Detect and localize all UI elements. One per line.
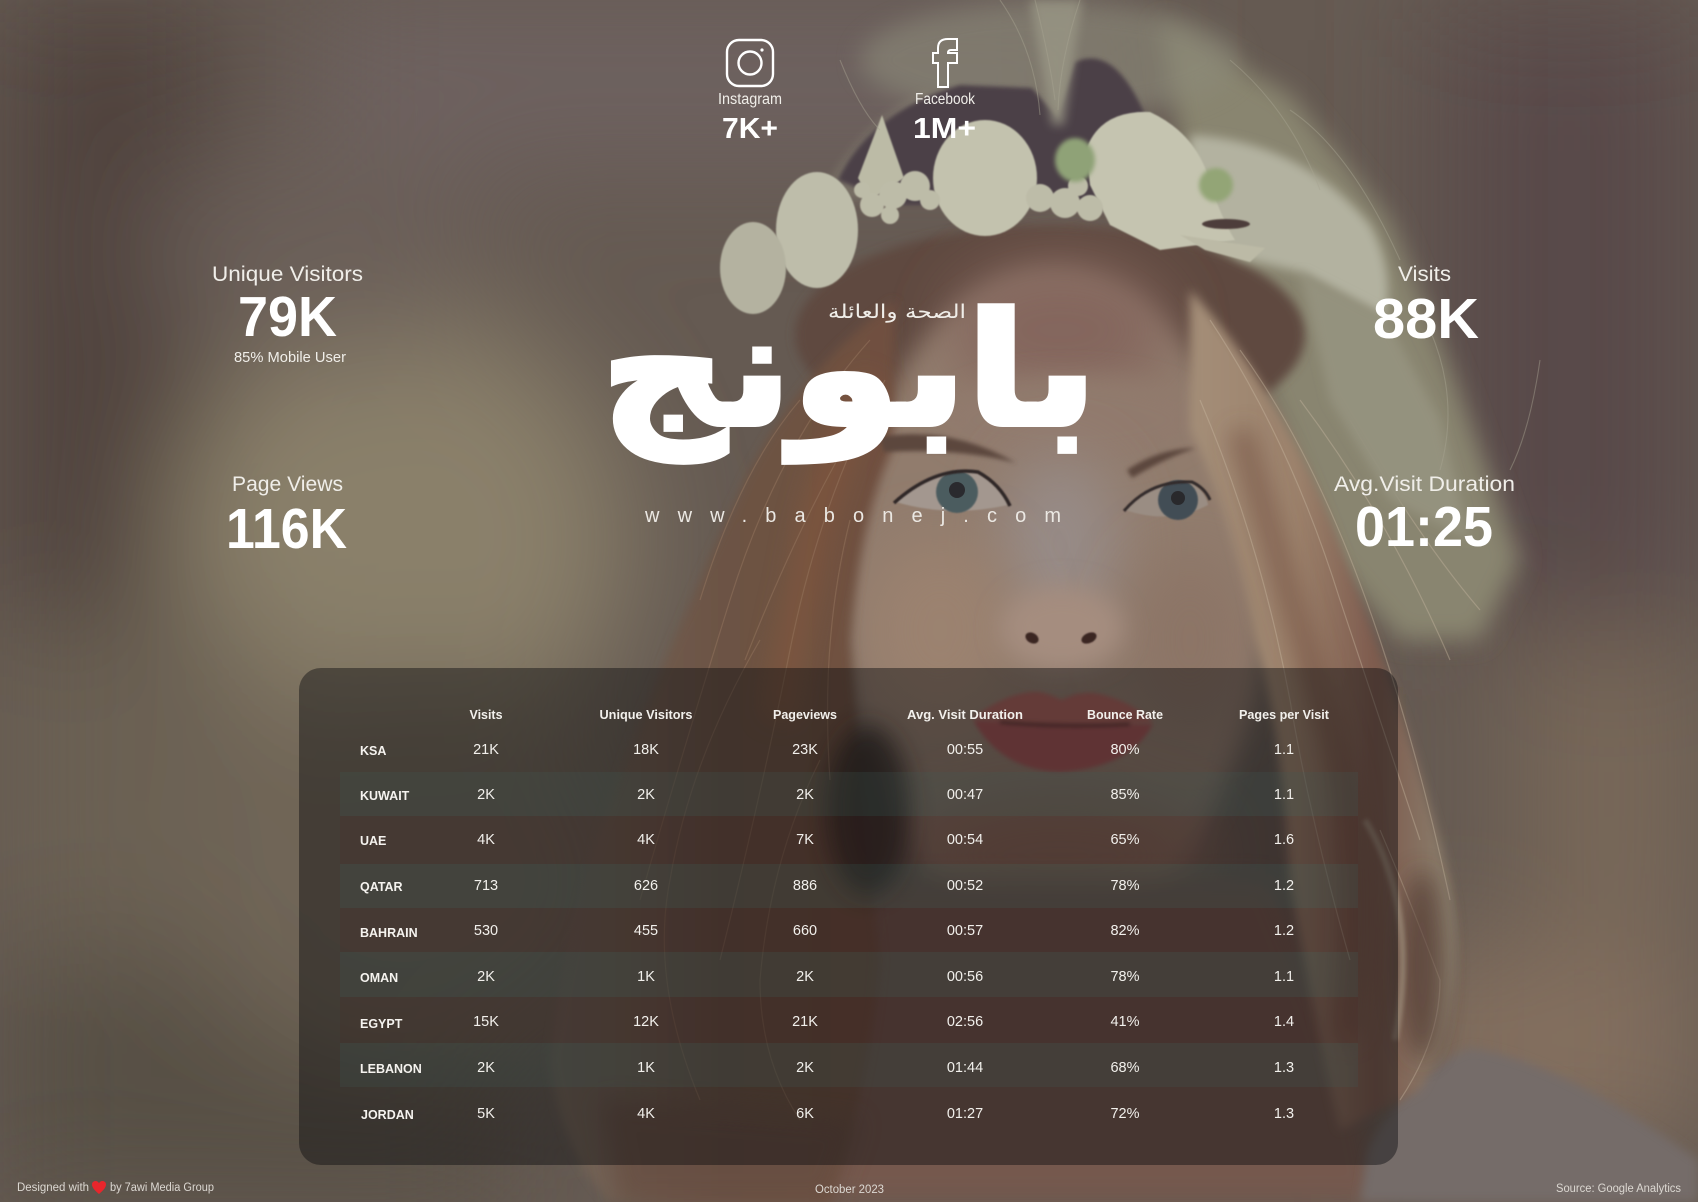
head hair below crown	[795, 225, 1305, 445]
row: Kuwait: 85%	[1110, 787, 1140, 803]
row: Jordan: 01:27	[947, 1106, 983, 1122]
row: UAE: 65%	[1110, 832, 1140, 848]
Facebook label: Facebook	[915, 91, 975, 108]
row: Egypt: 02:56	[947, 1014, 983, 1030]
row: Qatar: QATAR	[360, 880, 403, 894]
frizz parting	[1030, 0, 1082, 125]
stat: Unique Visitors	[212, 263, 363, 366]
stat: Avg. Visit Duration	[1334, 473, 1515, 559]
row: Kuwait: 2K	[796, 787, 814, 803]
row: UAE: 4K	[637, 832, 655, 848]
Instagram followers: 7K+	[722, 113, 778, 145]
footer: designer credit: Designed with	[17, 1182, 89, 1194]
stat: Visits: 88K	[1373, 287, 1479, 351]
row: Oman: OMAN	[360, 971, 398, 985]
flower crown	[720, 112, 1470, 540]
logo name: بابونج	[601, 280, 1097, 462]
row: Oman: 00:56	[947, 969, 983, 985]
footer: designer credit	[17, 1181, 214, 1194]
sweater	[1360, 1048, 1698, 1202]
row: Lebanon: 1K	[637, 1060, 655, 1076]
row: Oman	[360, 969, 1294, 985]
logo: Babonej wordmark	[601, 280, 1097, 527]
footer: date: October 2023	[815, 1184, 884, 1196]
row: UAE: 7K	[796, 832, 814, 848]
row: Oman: 2K	[477, 969, 495, 985]
row: Qatar: 78%	[1110, 878, 1140, 894]
face	[640, 260, 1380, 1202]
row: Qatar: 00:52	[947, 878, 983, 894]
row: Kuwait: KUWAIT	[360, 789, 410, 803]
row: Qatar	[360, 878, 1294, 894]
left hair	[550, 300, 910, 1202]
website: www.babonej.com	[644, 505, 1061, 527]
stat: Instagram	[718, 40, 782, 145]
table header: Pageviews	[773, 707, 837, 722]
table header: Unique Visitors	[600, 707, 692, 722]
icon: heart	[92, 1181, 106, 1194]
row: Jordan: 4K	[637, 1106, 655, 1122]
nose	[1023, 630, 1098, 646]
row: Kuwait	[360, 787, 1294, 803]
row: Bahrain	[360, 923, 1294, 940]
stat: Unique Visitors: 85% Mobile User	[234, 350, 346, 366]
stat: Avg. Visit Duration: 01:25	[1355, 495, 1493, 559]
row: UAE: 1.6	[1274, 832, 1294, 848]
row: Bahrain: 660	[793, 923, 817, 939]
logo tagline: الصحة والعائلة	[828, 301, 966, 323]
row: Lebanon: 1.3	[1274, 1060, 1294, 1076]
stat: Visits: Visits	[1398, 263, 1451, 286]
row: Bahrain: 00:57	[947, 923, 983, 939]
stat: Page Views	[226, 473, 347, 561]
row: Kuwait: 00:47	[947, 787, 983, 803]
row: Bahrain: BAHRAIN	[360, 926, 418, 940]
stat: Facebook	[913, 39, 976, 145]
row: Egypt: 1.4	[1274, 1014, 1294, 1030]
row: Kuwait: 1.1	[1274, 787, 1294, 803]
footer: source: Source: Google Analytics	[1556, 1183, 1681, 1195]
Facebook followers: 1M+	[913, 113, 976, 145]
row: Jordan: 72%	[1110, 1106, 1140, 1122]
row: Qatar: 886	[793, 878, 817, 894]
row: KSA: 80%	[1110, 742, 1140, 758]
icon: Facebook	[933, 39, 957, 87]
table header: Avg. Visit Duration	[907, 707, 1023, 722]
row: Lebanon: LEBANON	[360, 1062, 422, 1076]
row: Oman: 78%	[1110, 969, 1140, 985]
footer: designer credit: by 7awi Media Group	[110, 1182, 214, 1194]
neck and chest	[640, 880, 1380, 1202]
row: Jordan: 1.3	[1274, 1106, 1294, 1122]
row: Lebanon: 01:44	[947, 1060, 983, 1076]
row: Kuwait: 2K	[477, 787, 495, 803]
table header: Visits	[470, 707, 502, 722]
row: Lebanon: 68%	[1110, 1060, 1140, 1076]
left eye and brow	[880, 434, 1016, 513]
row: UAE: 4K	[477, 832, 495, 848]
dark crown of hair	[838, 58, 1155, 205]
row: KSA: KSA	[360, 744, 386, 758]
row: Egypt: 12K	[633, 1014, 659, 1030]
table header: Pages per Visit	[1239, 707, 1330, 722]
row: Oman: 2K	[796, 969, 814, 985]
stat: Unique Visitors: 79K	[238, 285, 337, 349]
row: Egypt: EGYPT	[360, 1017, 403, 1031]
row: Egypt: 15K	[473, 1014, 499, 1030]
row: UAE: 00:54	[947, 832, 983, 848]
table header	[470, 707, 1330, 722]
row: Lebanon: 2K	[477, 1060, 495, 1076]
row: Kuwait: 2K	[637, 787, 655, 803]
row: Jordan: 6K	[796, 1106, 814, 1122]
row: Qatar: 626	[634, 878, 658, 894]
icon: Instagram	[727, 40, 773, 86]
row: Bahrain: 82%	[1110, 923, 1140, 939]
row: Bahrain: 530	[474, 923, 498, 939]
row: Egypt: 41%	[1110, 1014, 1140, 1030]
row: Qatar: 713	[474, 878, 498, 894]
row: Lebanon: 2K	[796, 1060, 814, 1076]
lips	[973, 692, 1153, 772]
right eye and brow	[1124, 448, 1210, 520]
row: Bahrain: 455	[634, 923, 658, 939]
stat: Page Views: 116K	[226, 497, 347, 561]
stat: Avg. Visit Duration: Avg.Visit Duration	[1334, 473, 1515, 496]
row: KSA: 21K	[473, 742, 499, 758]
row: Egypt	[360, 1014, 1294, 1031]
stray hair strands	[840, 0, 1540, 470]
right hair	[1190, 290, 1480, 1130]
table header: Bounce Rate	[1087, 707, 1163, 722]
sunlit hair halo	[820, 2, 1520, 640]
row: Bahrain: 1.2	[1274, 923, 1294, 939]
row: KSA: 23K	[792, 742, 818, 758]
row: KSA: 1.1	[1274, 742, 1294, 758]
row: Jordan	[361, 1106, 1294, 1122]
row: Oman: 1K	[637, 969, 655, 985]
social stats row	[718, 39, 976, 145]
Instagram label: Instagram	[718, 91, 782, 108]
row: Lebanon	[360, 1060, 1294, 1076]
row: Oman: 1.1	[1274, 969, 1294, 985]
panel: country statistics table	[299, 668, 1398, 1165]
row: KSA	[360, 742, 1294, 758]
stat: Unique Visitors: Unique Visitors	[212, 263, 363, 286]
row: UAE: UAE	[360, 834, 386, 848]
row: KSA: 18K	[633, 742, 659, 758]
table row stripes	[340, 772, 1358, 1087]
row: KSA: 00:55	[947, 742, 983, 758]
row: Egypt: 21K	[792, 1014, 818, 1030]
row: UAE	[360, 832, 1294, 848]
row: Jordan: JORDAN	[361, 1108, 414, 1122]
stat: Page Views: Page Views	[232, 473, 343, 496]
row: Qatar: 1.2	[1274, 878, 1294, 894]
row: Jordan: 5K	[477, 1106, 495, 1122]
